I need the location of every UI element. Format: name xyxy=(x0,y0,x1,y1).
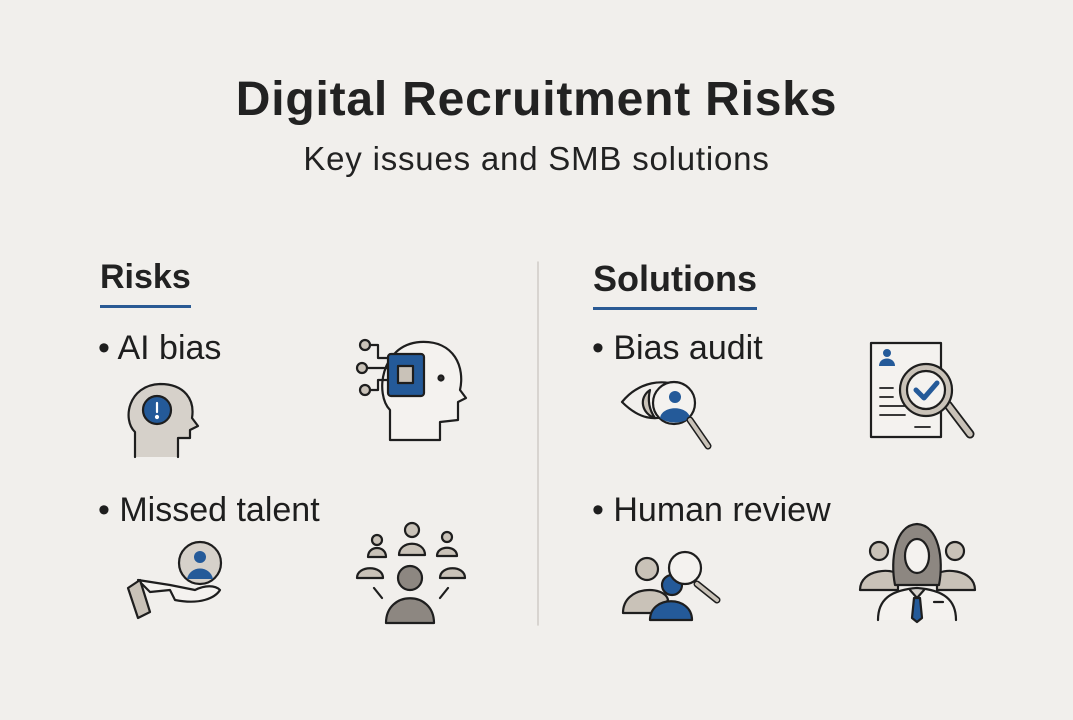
icon: people with magnifier xyxy=(623,552,717,620)
icon: AI brain head xyxy=(357,340,466,440)
icon: document with check magnifier xyxy=(871,343,970,437)
heading: Solutions: Solutions xyxy=(593,258,757,299)
subtitle: Key issues and SMB solutions xyxy=(303,140,770,177)
title: Digital Recruitment Risks xyxy=(236,73,837,126)
bullet: Human review: • Human review xyxy=(592,491,831,529)
icon: head with alert xyxy=(129,384,198,457)
icon: woman reviewer xyxy=(860,524,975,622)
icon: hand with person xyxy=(128,542,221,618)
heading: Risks: Risks xyxy=(100,258,191,296)
icon: group of people xyxy=(357,523,465,623)
icon: eye with magnifier xyxy=(622,382,708,446)
bullet: Missed talent: • Missed talent xyxy=(98,491,320,529)
bullet: AI bias: • AI bias xyxy=(98,329,221,367)
bullet: Bias audit: • Bias audit xyxy=(592,329,763,367)
